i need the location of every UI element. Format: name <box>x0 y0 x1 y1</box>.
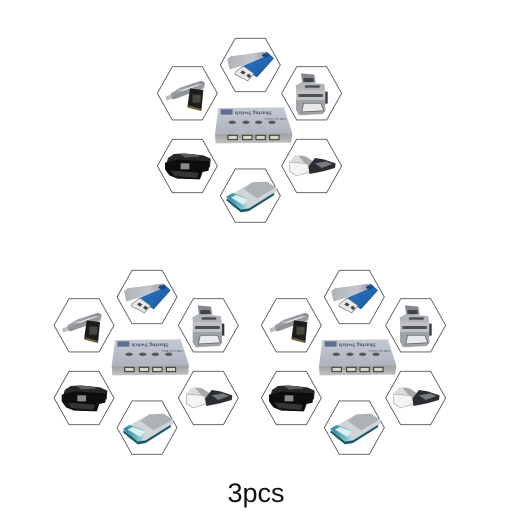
hexagon: card reader stick <box>157 67 217 120</box>
USB sharing switch box: USB 2.0 4 Ports <box>161 349 183 353</box>
USB sharing switch box: Sharing Switch <box>234 109 272 115</box>
hexagon: flatbed scanner <box>117 401 177 454</box>
device group 2 (bottom left) <box>54 270 238 454</box>
device group 3 (bottom right) <box>261 270 446 454</box>
USB sharing switch box: USB 2.0 4 Ports <box>368 349 390 353</box>
hexagon: laser printer <box>386 299 446 352</box>
hexagon: card reader stick <box>261 299 321 352</box>
quantity caption: 3pcs <box>227 478 285 508</box>
hexagon: document scanner <box>282 139 342 193</box>
USB sharing switch box: Sharing Switch <box>338 341 376 347</box>
hexagon: document scanner <box>178 371 238 425</box>
hexagon: black inkjet printer <box>261 371 321 425</box>
hexagon: document scanner <box>386 371 446 425</box>
hexagon: USB flash drive <box>324 270 384 324</box>
hexagon: flatbed scanner <box>324 401 384 454</box>
hexagon: flatbed scanner <box>220 169 280 222</box>
hexagon: USB flash drive <box>117 270 177 324</box>
hexagon: laser printer <box>178 299 238 352</box>
device group 1 (top) <box>157 38 342 222</box>
hexagon: USB flash drive <box>220 38 280 92</box>
hexagon: laser printer <box>282 67 342 120</box>
hexagon: black inkjet printer <box>157 139 217 193</box>
hexagon: card reader stick <box>54 299 114 352</box>
USB sharing switch box <box>112 339 189 375</box>
USB sharing switch box: USB 2.0 4 Ports <box>264 117 286 121</box>
USB sharing switch box <box>319 339 396 375</box>
hexagon: black inkjet printer <box>54 371 114 425</box>
USB sharing switch box <box>215 107 292 143</box>
USB sharing switch box: Sharing Switch <box>131 341 168 347</box>
